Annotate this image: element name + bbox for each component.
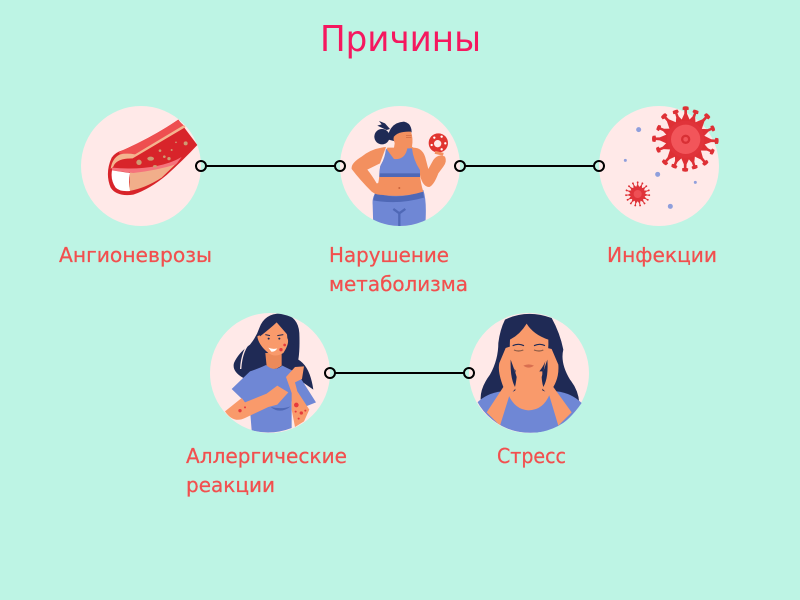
icon: donut bbox=[429, 133, 448, 153]
icon: particles bbox=[624, 127, 697, 209]
label: allergy: реакции bbox=[186, 473, 275, 497]
panel: stress icon bbox=[469, 313, 589, 433]
icon: small virus bbox=[625, 181, 650, 207]
label: metabolism: Нарушение bbox=[329, 243, 449, 267]
label: stress: Стресс bbox=[497, 444, 566, 468]
panel: angioneurosis icon bbox=[81, 106, 201, 226]
panel: metabolism icon bbox=[340, 106, 460, 228]
label: allergy: Аллергические bbox=[186, 444, 347, 468]
title: Причины bbox=[320, 19, 481, 60]
icon: large virus bbox=[652, 106, 719, 172]
panel: infections icon bbox=[599, 106, 719, 226]
label: infections: Инфекции bbox=[607, 243, 717, 267]
connector nodes bbox=[196, 161, 604, 378]
label: angioneurosis: Ангионеврозы bbox=[59, 243, 212, 267]
connector lines bbox=[205, 166, 595, 373]
panel: allergy icon bbox=[210, 313, 330, 433]
label: metabolism: метаболизма bbox=[329, 272, 468, 296]
